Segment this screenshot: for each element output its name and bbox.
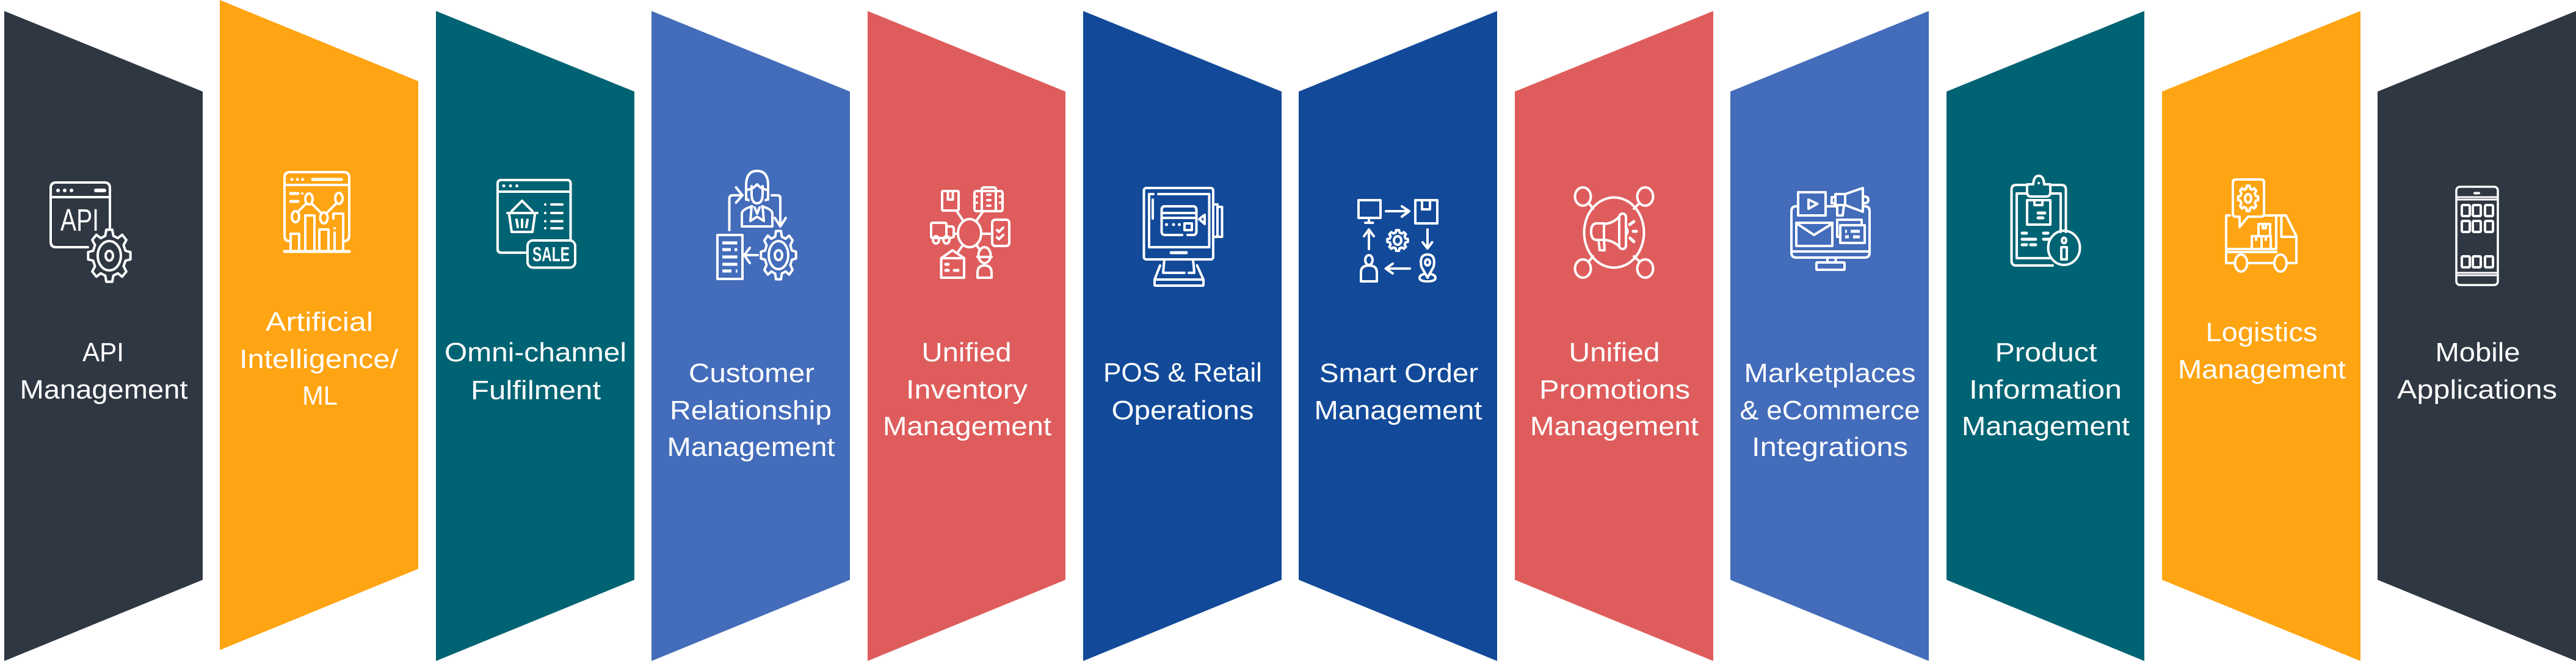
panel: Omni-channel Fulfilment xyxy=(436,11,634,661)
icon: customer service flow xyxy=(717,171,796,280)
label: Artificial Intelligence/ML: Intelligence/ xyxy=(239,344,399,374)
label: Smart Order Management xyxy=(1314,358,1482,425)
label: Unified Promotions Management: Management xyxy=(1530,411,1699,441)
panel: Unified Promotions Management xyxy=(1515,11,1713,661)
label: Mobile Applications: Mobile xyxy=(2435,338,2520,367)
label: Customer Relationship Management: Management xyxy=(667,432,835,462)
label: Omni-channel Fulfilment: Omni-channel xyxy=(444,338,626,367)
panel: Product Information Management xyxy=(1947,11,2144,661)
panel: API Management xyxy=(4,11,203,661)
label: Product Information Management: Information xyxy=(1969,375,2122,405)
panel: Smart Order Management xyxy=(1299,11,1497,661)
label: Artificial Intelligence/ML: Artificial xyxy=(266,307,373,337)
icon: API window with gear xyxy=(51,182,131,282)
label: Smart Order Management: Management xyxy=(1314,396,1482,425)
panel: POS & Retail Operations xyxy=(1083,11,1282,661)
icon: POS terminal xyxy=(1144,188,1222,286)
icon: product clipboard with info xyxy=(2011,176,2080,265)
icon: smartphone apps xyxy=(2456,187,2498,285)
panel shape xyxy=(1083,11,1282,661)
label: API Management: Management xyxy=(20,375,188,405)
icon: sale basket window: SALE xyxy=(532,243,570,265)
label: Artificial Intelligence/ML: ML xyxy=(302,381,338,411)
label: Omni-channel Fulfilment: Fulfilment xyxy=(471,375,601,405)
label: Product Information Management: Management xyxy=(1962,411,2130,441)
icon: API window with gear: API xyxy=(60,203,99,237)
panel: Logistics Management xyxy=(2162,11,2360,661)
panel: Customer Relationship Management xyxy=(651,11,850,661)
panel: Unified Inventory Management xyxy=(868,11,1065,661)
panel shape xyxy=(868,11,1065,661)
icon: analytics dashboard xyxy=(285,172,349,251)
panel shape xyxy=(436,11,634,661)
label: Unified Inventory Management: Unified xyxy=(922,338,1011,367)
panel shape xyxy=(1515,11,1713,661)
label: POS & Retail Operations xyxy=(1103,358,1262,425)
label: Unified Inventory Management: Management xyxy=(883,411,1051,441)
panel shape xyxy=(4,11,203,661)
panel shape xyxy=(1299,11,1497,661)
icon: inventory hub xyxy=(931,187,1009,278)
label: API Management xyxy=(20,338,188,405)
label: Logistics Management: Logistics xyxy=(2205,317,2318,347)
label: Logistics Management xyxy=(2178,317,2346,385)
icon: sale basket window xyxy=(498,180,575,267)
label: Unified Promotions Management: Unified xyxy=(1569,338,1660,367)
label: Marketplaces & eCommerce Integrations: Marketplaces xyxy=(1744,358,1916,388)
label: Unified Inventory Management xyxy=(883,338,1051,441)
panel shape xyxy=(2162,11,2360,661)
label: Unified Promotions Management xyxy=(1530,338,1699,441)
label: Omni-channel Fulfilment xyxy=(444,338,626,405)
label: POS & Retail Operations: POS & Retail xyxy=(1103,358,1262,388)
panel: Artificial Intelligence/ML xyxy=(220,0,418,650)
label: Unified Inventory Management: Inventory xyxy=(906,375,1028,405)
label: Mobile Applications: Applications xyxy=(2397,375,2557,405)
panel shape xyxy=(651,11,850,661)
label: Product Information Management: Product xyxy=(1995,338,2097,367)
panel shape xyxy=(1730,11,1929,661)
panel shape xyxy=(1947,11,2144,661)
label: Artificial Intelligence/ML xyxy=(239,307,399,411)
label: Marketplaces & eCommerce Integrations xyxy=(1740,358,1920,462)
label: POS & Retail Operations: Operations xyxy=(1111,396,1254,425)
label: Marketplaces & eCommerce Integrations: Integrations xyxy=(1752,432,1908,462)
label: Customer Relationship Management: Customer xyxy=(689,358,815,388)
panel shape xyxy=(220,0,418,650)
label: Marketplaces & eCommerce Integrations: & eCommerce xyxy=(1740,396,1920,425)
panel shape xyxy=(2378,11,2576,661)
icon: digital marketing monitor xyxy=(1791,188,1870,270)
label: Customer Relationship Management xyxy=(667,358,835,462)
label: Unified Promotions Management: Promotions xyxy=(1539,375,1690,405)
panel: Mobile Applications xyxy=(2378,11,2576,661)
label: Logistics Management: Management xyxy=(2178,355,2346,385)
label: Customer Relationship Management: Relationship xyxy=(670,396,832,425)
label: Smart Order Management: Smart Order xyxy=(1319,358,1478,388)
label: API Management: API xyxy=(82,338,124,367)
icon: delivery truck with gear xyxy=(2226,179,2296,272)
icon: megaphone network xyxy=(1575,187,1653,278)
icon: order flow cycle xyxy=(1359,200,1437,281)
label: Mobile Applications xyxy=(2397,338,2557,405)
panel: Marketplaces & eCommerce Integrations xyxy=(1730,11,1929,661)
label: Product Information Management xyxy=(1962,338,2130,441)
